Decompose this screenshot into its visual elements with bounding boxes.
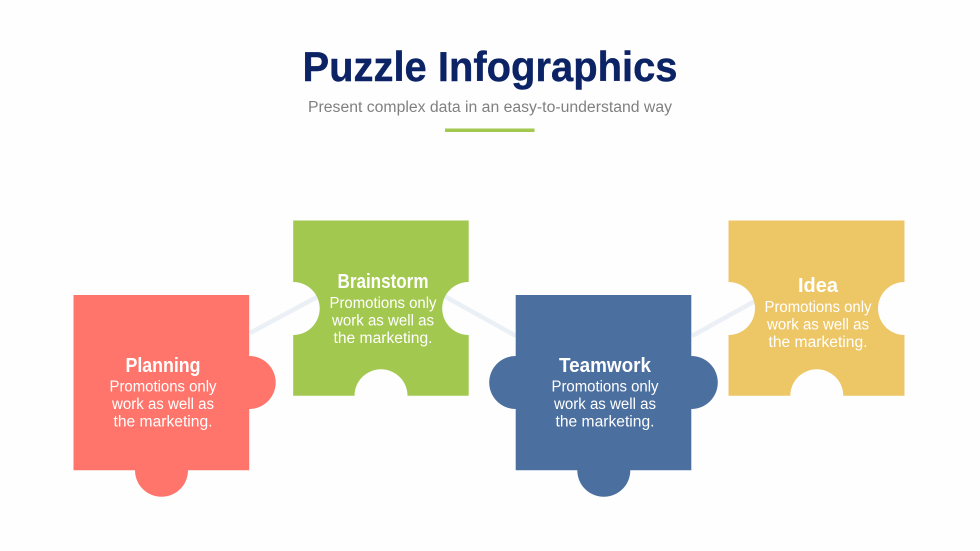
body text: planning: work as well as xyxy=(111,396,214,413)
heading: brainstorm: Brainstorm xyxy=(338,271,428,293)
puzzle piece: idea xyxy=(728,220,904,396)
body text: brainstorm: the marketing. xyxy=(334,330,432,347)
body text: planning: the marketing. xyxy=(114,414,212,430)
body text: teamwork xyxy=(552,378,659,430)
connector: planning to brainstorm xyxy=(250,296,318,333)
body text: teamwork: the marketing. xyxy=(556,414,654,430)
title: Puzzle Infographics xyxy=(302,43,678,90)
body text: brainstorm: Promotions only xyxy=(330,295,437,312)
heading: teamwork: Teamwork xyxy=(559,355,652,377)
body text: brainstorm: work as well as xyxy=(331,312,434,330)
panel: idea xyxy=(728,220,904,396)
body text: idea xyxy=(764,299,872,351)
heading: planning: Planning xyxy=(126,355,200,377)
panel: planning xyxy=(74,295,276,497)
connector: teamwork to idea xyxy=(692,301,755,336)
title underline xyxy=(445,128,534,132)
connector: brainstorm to teamwork xyxy=(445,296,516,336)
body text: teamwork: work as well as xyxy=(553,396,656,413)
panel: teamwork xyxy=(489,295,718,497)
body text: brainstorm xyxy=(330,295,437,347)
heading: idea: Idea xyxy=(798,275,839,297)
puzzle piece: teamwork xyxy=(489,295,718,497)
body text: idea: work as well as xyxy=(766,316,869,334)
body text: planning: Promotions only xyxy=(110,378,217,396)
subtitle: Present complex data in an easy-to-understand way xyxy=(308,99,672,116)
puzzle piece: planning xyxy=(74,295,276,497)
body text: planning xyxy=(110,378,217,430)
body text: teamwork: Promotions only xyxy=(552,378,659,396)
body text: idea: the marketing. xyxy=(768,334,868,351)
panel: brainstorm xyxy=(293,220,469,396)
body text: idea: Promotions only xyxy=(764,299,872,316)
puzzle piece: brainstorm xyxy=(293,220,469,396)
